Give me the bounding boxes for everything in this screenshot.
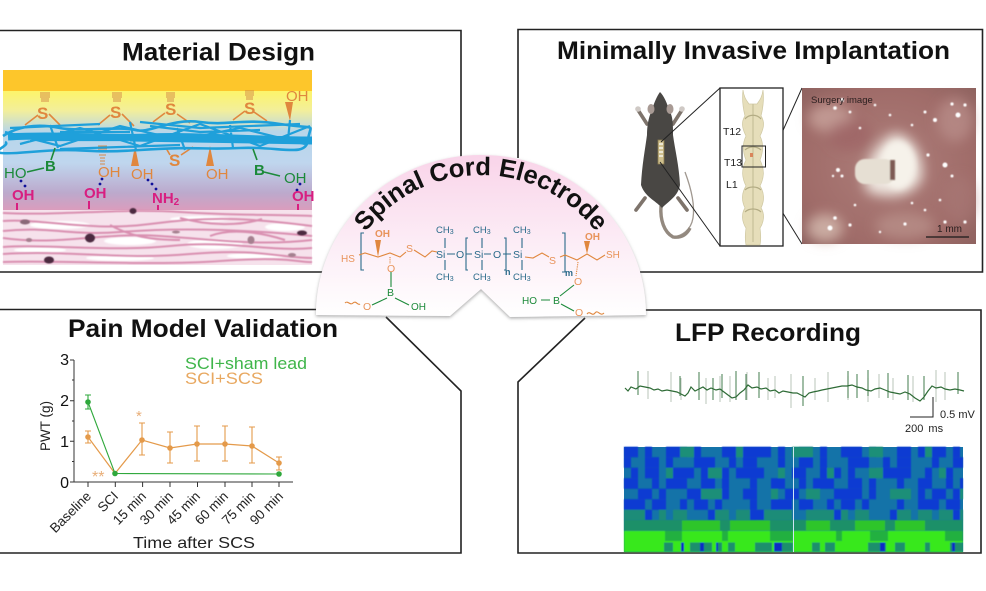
line chart: PWT over time: 0 [60, 475, 69, 492]
line chart: PWT over time: Baseline [47, 489, 94, 536]
heading: LFP recording: LFP Recording [675, 319, 861, 347]
chemical bonds: disulfide and hydroxyl [25, 88, 308, 183]
chemical structure: O [363, 301, 371, 313]
chemical structure: B [553, 295, 560, 307]
line chart: PWT over time: 15 min [110, 489, 149, 528]
chemical structure: S [406, 243, 413, 255]
chemical structure: OH [375, 229, 390, 240]
chemical groups: boronate and tissue bonding: OH [84, 185, 106, 202]
surgery photo [802, 88, 976, 244]
chemical structure: OH [585, 232, 600, 243]
panel: minimally invasive implantation [518, 30, 982, 272]
series: SCI+SCS: * [136, 408, 142, 425]
heading: minimally invasive implantation: Minimally Invasive Implantation [557, 37, 950, 65]
line chart: PWT over time: 60 min [192, 489, 231, 528]
chemical structure: CH [513, 225, 527, 236]
chemical bonds: disulfide and hydroxyl: OH [131, 166, 154, 183]
chemical bonds: disulfide and hydroxyl: S [110, 103, 121, 122]
chemical groups: boronate and tissue bonding: 2 [174, 197, 180, 208]
chemical structure: CH [436, 272, 450, 283]
chemical structure: SH [606, 250, 620, 261]
line chart: PWT over time: Time after SCS [133, 535, 255, 552]
line chart: PWT over time: 2 [60, 393, 69, 410]
panel: LFP recording [518, 310, 981, 553]
series: SCI+SCS [85, 408, 282, 486]
chart legend [185, 354, 307, 388]
chemical structure: O [456, 249, 464, 261]
chemical groups: boronate and tissue bonding: B [45, 158, 56, 175]
LFP trace [625, 370, 964, 408]
chemical structure: CH [473, 272, 487, 283]
chemical structure: O [574, 276, 582, 288]
line chart: PWT over time: 3 [60, 352, 69, 369]
icon: mouse with implanted electrode [635, 92, 694, 237]
chemical structure: HO [522, 296, 537, 307]
chemical groups: boronate and tissue bonding: OH [292, 188, 314, 205]
heading: pain model validation: Pain Model Validation [68, 315, 338, 343]
chemical bonds: disulfide and hydroxyl: S [37, 104, 48, 123]
line chart: PWT over time: 90 min [247, 489, 286, 528]
panel: material design [0, 30, 461, 272]
panel: spine inset: T12 [723, 126, 741, 138]
chart legend: SCI+SCS [185, 369, 263, 388]
panel: spine inset [720, 88, 783, 246]
line chart: PWT over time: 45 min [164, 489, 203, 528]
chemical structure: S [549, 255, 556, 267]
surgery photo: Surgery image [811, 95, 873, 106]
chemical structure: HS [341, 254, 355, 265]
heading: material design: Material Design [122, 38, 315, 66]
tissue micrograph [3, 208, 312, 265]
line chart: PWT over time: 75 min [219, 489, 258, 528]
chemical bonds: disulfide and hydroxyl: S [244, 99, 255, 118]
chemical structure: 3 [450, 276, 454, 283]
panel: spine inset: T13 [724, 157, 742, 169]
chemical structure: O [493, 249, 501, 261]
series: SCI+SCS: ** [92, 469, 104, 486]
chemical groups: boronate and tissue bonding: OH [12, 187, 34, 204]
chemical structure: 3 [527, 276, 531, 283]
heading: spinal cord electrode: Spinal Cord Electrode [355, 156, 604, 230]
spectrogram [624, 447, 963, 552]
chart legend: SCI+sham lead [185, 354, 307, 373]
chemical groups: boronate and tissue bonding: OH [284, 170, 306, 187]
chemical structure: 3 [487, 229, 491, 236]
chemical bonds: disulfide and hydroxyl: OH [98, 164, 120, 181]
line chart: PWT over time: PWT (g) [38, 401, 53, 451]
panel: pain model validation [0, 310, 461, 553]
chemical structure: 3 [487, 276, 491, 283]
panel: spine inset: L1 [726, 179, 738, 191]
surgery photo: 1 mm [937, 224, 962, 235]
chemical bonds: disulfide and hydroxyl: S [169, 151, 180, 170]
chemical structure: CH [436, 225, 450, 236]
line chart: PWT over time: 1 [60, 434, 69, 451]
blue polymer scribble [0, 120, 312, 153]
chemical groups: boronate and tissue bonding: HO [4, 165, 26, 182]
chemical structure: CH [473, 225, 487, 236]
illustration: material interface layers [0, 70, 314, 265]
chemical structure: 3 [450, 229, 454, 236]
chemical structure: m [565, 268, 573, 278]
chemical structure: O [575, 307, 583, 319]
chemical structure: Si [474, 249, 483, 261]
chemical structure: Si [513, 249, 522, 261]
chemical structure: n [505, 267, 510, 277]
chemical groups: boronate and tissue bonding [4, 148, 314, 210]
chemical structure: Si [436, 249, 445, 261]
chemical structure: 3 [527, 229, 531, 236]
chemical structure: O [387, 263, 395, 275]
line chart: PWT over time: SCI [95, 489, 121, 515]
chemical structure: CH [513, 272, 527, 283]
chemical structure: OH [411, 302, 426, 313]
chemical bonds: disulfide and hydroxyl: OH [286, 88, 308, 105]
chemical structure [341, 225, 620, 319]
chemical groups: boronate and tissue bonding: NH [152, 190, 174, 207]
scale bar: 0.5 mV [940, 409, 976, 421]
callout lines to spine [660, 88, 802, 246]
panel: spinal cord electrode dome [314, 154, 648, 320]
scale bar [905, 397, 976, 435]
chemical groups: boronate and tissue bonding: B [254, 162, 265, 179]
chemical bonds: disulfide and hydroxyl: OH [206, 166, 228, 183]
chemical bonds: disulfide and hydroxyl: S [165, 100, 176, 119]
line chart: PWT over time [38, 352, 307, 552]
chemical structure: B [387, 287, 394, 299]
line chart: PWT over time: 30 min [137, 489, 176, 528]
series: SCI+sham lead [85, 395, 282, 477]
scale bar: 200 ms [905, 423, 944, 435]
